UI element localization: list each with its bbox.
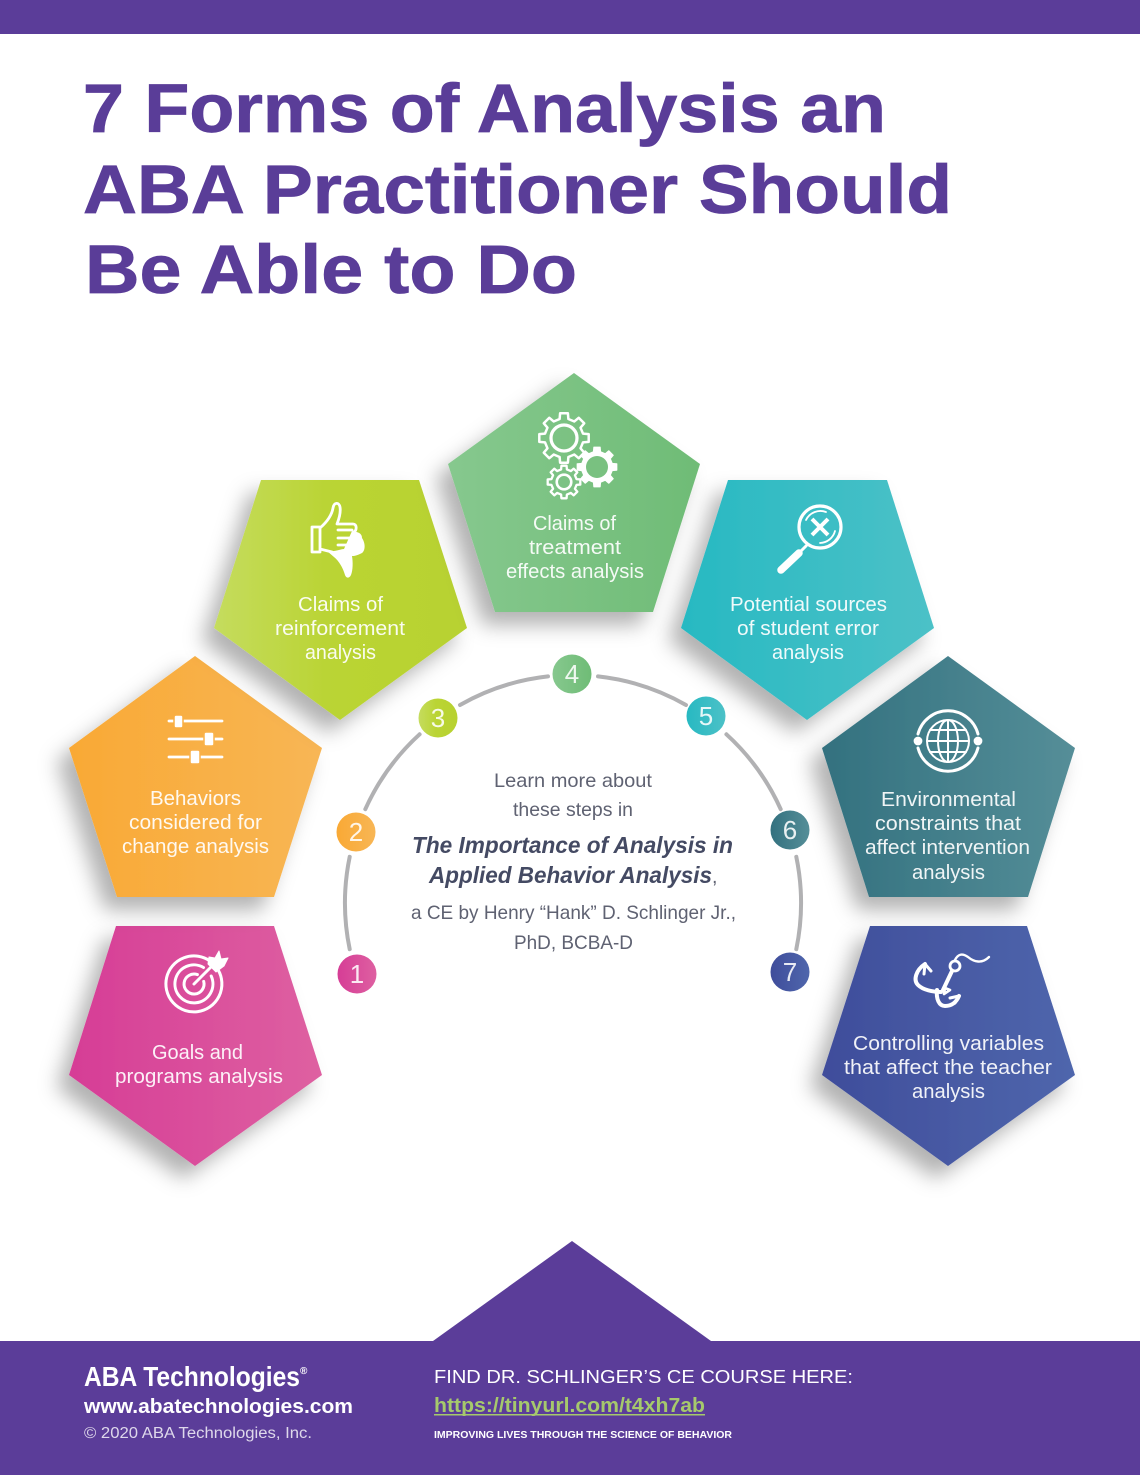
panel: behaviors considered for change analysis [69,656,322,897]
title: 7 Forms of Analysis an [83,70,886,147]
footer course call to action: IMPROVING LIVES THROUGH THE SCIENCE OF BEHAVIOR [434,1430,733,1441]
center text block: a CE by Henry “Hank” D. Schlinger Jr., [411,902,736,924]
panel: potential sources of student error analysis: of student error [737,618,879,640]
step number 7 [770,952,810,992]
panel: claims of treatment effects analysis: effects analysis [506,561,644,583]
semicircular arc connecting the steps [345,676,801,949]
footer logo and website: ® [300,1366,308,1377]
footer course call to action [434,1367,853,1441]
panel: behaviors considered for change analysis: considered for [129,812,262,834]
panel: controlling variables analysis: Controlling variables [853,1033,1044,1055]
icon: target with star [166,951,228,1012]
step number 6 [770,810,810,850]
icon: thumbs up and down [312,503,365,578]
panel: potential sources of student error analysis: Potential sources [730,594,887,616]
panel: potential sources of student error analysis: analysis [772,642,844,664]
step number 1: 1 [350,959,364,989]
icon: fishing hook [916,955,989,1006]
footer course call to action: https://tinyurl.com/t4xh7ab [434,1395,705,1417]
panel: claims of reinforcement analysis: analysis [305,642,376,664]
step number 5: 5 [699,701,713,731]
panel: environmental constraints analysis [822,656,1075,897]
step number 7: 7 [783,957,797,987]
footer band [0,1341,1140,1475]
step number 3: 3 [431,703,445,733]
step number 2 [336,812,376,852]
panel: claims of treatment effects analysis [448,373,700,612]
footer triangle [433,1241,711,1341]
step number 2: 2 [349,817,363,847]
footer course call to action: FIND DR. SCHLINGER’S CE COURSE HERE: [434,1367,853,1387]
panel: potential sources of student error analysis [681,480,934,720]
footer logo and website [83,1361,353,1442]
center text block: these steps in [513,799,633,821]
step number 5 [686,696,726,736]
step number 1 [338,954,376,994]
panel: behaviors considered for change analysis: change analysis [122,836,269,858]
center text block [411,770,736,954]
center text block: The Importance of Analysis in [412,832,733,858]
footer logo and website: © 2020 ABA Technologies, Inc. [84,1425,312,1442]
icon: globe with rotating arrows [915,711,981,771]
panel: goals and programs analysis: programs analysis [115,1066,283,1088]
icon: magnifying glass with x [781,506,841,570]
panel: environmental constraints analysis: affect intervention [865,837,1030,859]
center text block: , [712,866,717,888]
panel: claims of treatment effects analysis: treatment [529,537,621,559]
title [83,70,952,308]
icon: gears [539,413,617,498]
footer logo and website: ABA Technologies [84,1361,300,1392]
panel: controlling variables analysis: analysis [912,1081,985,1103]
panel: claims of reinforcement analysis [214,480,467,720]
panel: goals and programs analysis [69,926,322,1166]
center text block: PhD, BCBA-D [514,932,633,954]
top purple bar [0,0,1140,34]
title: Be Able to Do [85,231,577,308]
panel: controlling variables analysis [822,926,1075,1166]
center text block: Applied Behavior Analysis [428,862,712,888]
panel: environmental constraints analysis: analysis [912,862,985,884]
step number 4: 4 [565,659,579,689]
step number 4 [552,654,592,694]
panel: environmental constraints analysis: constraints that [875,813,1021,835]
step number 6: 6 [783,815,797,845]
icon: sliders [169,715,222,764]
panel: claims of reinforcement analysis: reinforcement [275,618,405,640]
step number 3 [418,698,458,738]
panel: claims of treatment effects analysis: Claims of [533,513,616,535]
footer logo and website: www.abatechnologies.com [83,1396,353,1418]
panel: controlling variables analysis: that affect the teacher [844,1057,1052,1079]
panel: claims of reinforcement analysis: Claims of [298,594,383,616]
panel: goals and programs analysis: Goals and [152,1042,243,1064]
center text block: Learn more about [494,770,653,792]
panel: behaviors considered for change analysis: Behaviors [150,788,241,810]
title: ABA Practitioner Should [83,151,952,228]
panel: environmental constraints analysis: Environmental [881,789,1016,811]
